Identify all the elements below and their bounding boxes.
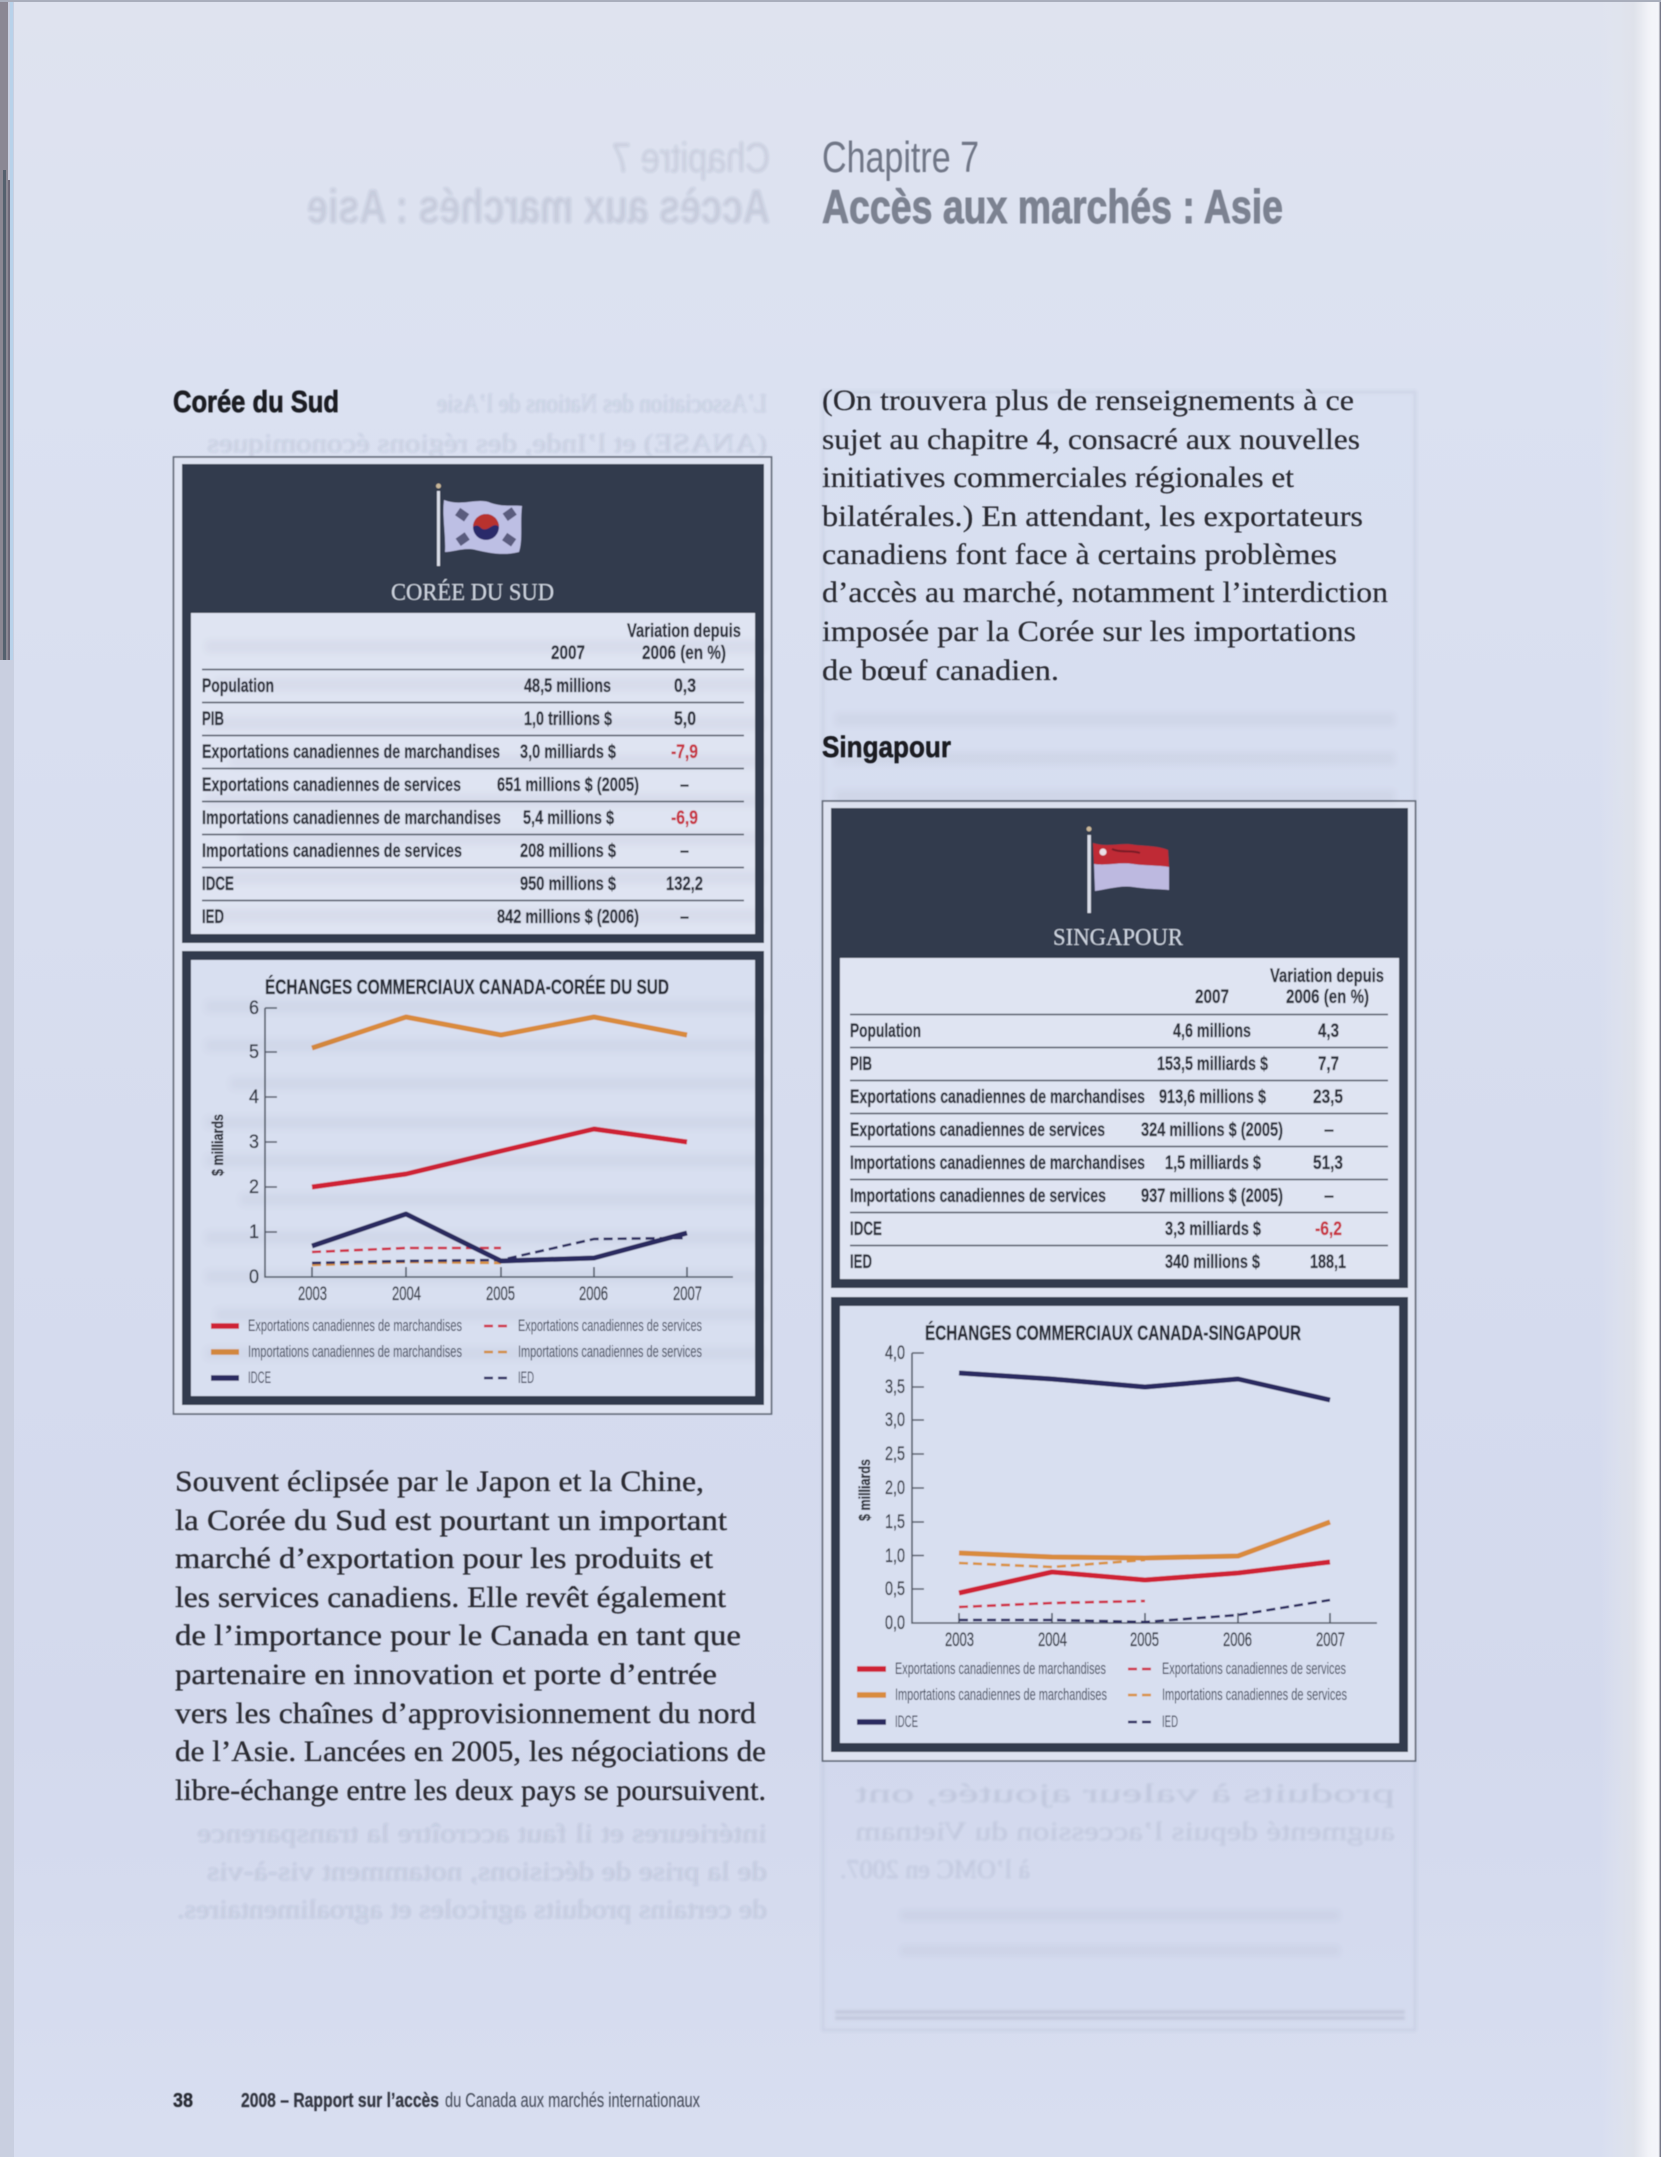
table: Singapour indicators: Variation depuis (1270, 966, 1384, 987)
table: Corée du Sud indicators: Importations canadiennes de services (202, 841, 462, 862)
chart axes: 2007 (1316, 1630, 1345, 1651)
chart axes: 0,5 (885, 1579, 905, 1600)
show-through: reverse page ghost text: produits à valeur ajoutée, ont (854, 1779, 1395, 1808)
table: Corée du Sud indicators: 48,5 millions (524, 676, 611, 697)
table: Corée du Sud indicators: 3,0 milliards $ (520, 742, 616, 763)
table: Corée du Sud indicators: PIB (202, 709, 224, 730)
chart axes: 2 (249, 1177, 259, 1198)
chart axes: 2007 (673, 1284, 702, 1305)
chapter title: Accès aux marchés : Asie (822, 180, 1283, 233)
table: Singapour indicators: 2006 (en %) (1286, 987, 1369, 1008)
chart axes: 1,0 (885, 1546, 905, 1567)
chart lines (312, 1017, 687, 1265)
show-through: reverse page ghost text: intérieures et il faut accroître la transparence (197, 1819, 767, 1848)
table: Singapour indicators: Importations canadiennes de services (850, 1186, 1106, 1207)
table: Singapour indicators: 340 millions $ (1165, 1252, 1260, 1273)
table: Singapour indicators: 153,5 milliards $ (1157, 1054, 1268, 1075)
text block: Corée du Sud paragraph: les services canadiens. Elle revêt également (175, 1581, 727, 1614)
text block: right column paragraph (822, 384, 1388, 687)
chart legend: Importations canadiennes de marchandises (895, 1686, 1107, 1704)
table: Singapour indicators: 324 millions $ (2005) (1141, 1120, 1283, 1141)
table: Corée du Sud indicators: Exportations canadiennes de services (202, 775, 461, 796)
chart legend: Importations canadiennes de services (1162, 1686, 1347, 1704)
chart axes: 3,5 (885, 1377, 905, 1398)
show-through: reverse page ghost text: augmenté depuis l’accession du Vietnam (855, 1817, 1395, 1846)
text block: Corée du Sud paragraph: Souvent éclipsée par le Japon et la Chine, (175, 1465, 704, 1498)
table: Corée du Sud indicators: 208 millions $ (520, 841, 616, 862)
chart axes: $ milliards (210, 1114, 227, 1176)
show-through: reverse page ghost text: à l’OMC en 2007. (840, 1855, 1030, 1884)
show-through: reverse page ghost text: Chapitre 7 (612, 134, 770, 181)
table: Corée du Sud indicators: 0,3 (674, 676, 696, 697)
table: Singapour indicators: 2007 (1195, 987, 1229, 1008)
footer: page number and running title: 38 (173, 2090, 193, 2112)
table: Singapour indicators: – (1324, 1120, 1334, 1141)
text block: Corée du Sud paragraph: la Corée du Sud est pourtant un important (175, 1504, 728, 1537)
table: Singapour indicators (850, 966, 1388, 1273)
table: Singapour indicators: Population (850, 1021, 921, 1042)
text block: Corée du Sud paragraph (175, 1465, 766, 1807)
chart axes: 2,0 (885, 1478, 905, 1499)
chart axes: 2,5 (885, 1444, 905, 1465)
table: Corée du Sud indicators: 2007 (551, 643, 585, 664)
table: Singapour indicators: PIB (850, 1054, 872, 1075)
chart axes: 2006 (1223, 1630, 1252, 1651)
table: Singapour indicators: – (1324, 1186, 1334, 1207)
chart axes: 2003 (945, 1630, 974, 1651)
table: Corée du Sud indicators: -6,9 (671, 808, 698, 829)
chart legend: IDCE (248, 1369, 271, 1387)
table: Singapour indicators: 188,1 (1310, 1252, 1346, 1273)
table: Singapour indicators: IED (850, 1252, 872, 1273)
chart legend: Exportations canadiennes de marchandises (248, 1317, 462, 1335)
chart axes: 2005 (1130, 1630, 1159, 1651)
text block: Corée du Sud paragraph: de l’importance pour le Canada en tant que (175, 1619, 741, 1652)
table: Singapour indicators: Exportations canadiennes de marchandises (850, 1087, 1145, 1108)
table: Singapour indicators: 913,6 millions $ (1159, 1087, 1266, 1108)
text block: right column paragraph: imposée par la Corée sur les importations (822, 615, 1356, 648)
table: Singapour indicators: 23,5 (1313, 1087, 1343, 1108)
show-through: reverse page ghost text: (ANASE) et l’Inde, des régions économiques (207, 429, 767, 458)
table: Singapour indicators: Importations canadiennes de marchandises (850, 1153, 1145, 1174)
country name: SINGAPOUR (1053, 925, 1183, 951)
panel: Singapour (822, 801, 1416, 1761)
table: Corée du Sud indicators: 132,2 (666, 874, 703, 895)
table: Corée du Sud indicators: Variation depuis (627, 621, 741, 642)
Singapour heading: Singapour (822, 731, 951, 764)
chart axes: 4 (249, 1087, 259, 1108)
table: Corée du Sud indicators: Population (202, 676, 274, 697)
chart axes: 0 (249, 1267, 259, 1288)
table: Singapour indicators: Exportations canadiennes de services (850, 1120, 1105, 1141)
text block: right column paragraph: canadiens font face à certains problèmes (822, 538, 1337, 571)
table: Singapour indicators: 4,6 millions (1173, 1021, 1251, 1042)
country name: CORÉE DU SUD (391, 580, 554, 606)
chart axes (210, 998, 733, 1305)
chart axes: 6 (249, 998, 259, 1019)
chart axes: 3 (249, 1132, 259, 1153)
chart: Échanges commerciaux Canada-Corée du Sud (182, 951, 764, 1405)
text block: right column paragraph: sujet au chapitre 4, consacré aux nouvelles (822, 423, 1360, 456)
table: Singapour indicators: 7,7 (1318, 1054, 1339, 1075)
table: Singapour indicators: IDCE (850, 1219, 882, 1240)
table: Corée du Sud indicators: 2006 (en %) (642, 643, 726, 664)
table: Corée du Sud indicators: Exportations canadiennes de marchandises (202, 742, 500, 763)
chart legend: Importations canadiennes de marchandises (248, 1343, 462, 1361)
table: Singapour indicators: 3,3 milliards $ (1165, 1219, 1261, 1240)
table: Singapour indicators: 1,5 milliards $ (1165, 1153, 1261, 1174)
table: Corée du Sud indicators: IED (202, 907, 224, 928)
text block: Corée du Sud paragraph: de l’Asie. Lancées en 2005, les négociations de (175, 1735, 766, 1768)
chart axes: 2005 (486, 1284, 515, 1305)
footer: page number and running title (173, 2090, 700, 2112)
text block: right column paragraph: d’accès au marché, notamment l’interdiction (822, 576, 1388, 609)
table: Corée du Sud indicators: 651 millions $ (2005) (497, 775, 639, 796)
table: Singapour indicators: 51,3 (1313, 1153, 1343, 1174)
text block: Corée du Sud paragraph: vers les chaînes d’approvisionnement du nord (175, 1697, 756, 1730)
chart legend (857, 1660, 1347, 1731)
chart lines (959, 1373, 1330, 1622)
footer: page number and running title: 2008 – Rapport sur l’accès (241, 2090, 439, 2112)
table: Corée du Sud indicators (202, 621, 744, 928)
show-through: reverse page box (823, 392, 1415, 2030)
chart axes: 5 (249, 1042, 259, 1063)
show-through: reverse page ghost text (177, 134, 1395, 1924)
panel: Corée du Sud profile (182, 464, 764, 943)
table: Corée du Sud indicators: -7,9 (671, 742, 698, 763)
chart axes: 2004 (1038, 1630, 1067, 1651)
table: Corée du Sud indicators: 950 millions $ (520, 874, 616, 895)
table: Corée du Sud indicators: 1,0 trillions $ (524, 709, 612, 730)
table: Corée du Sud indicators: – (680, 775, 689, 796)
table: Corée du Sud indicators: – (680, 907, 689, 928)
table: Corée du Sud indicators: 5,0 (674, 709, 696, 730)
table: Singapour indicators: 4,3 (1318, 1021, 1339, 1042)
show-through: reverse page ghost text: de la prise de décisions, notamment vis-à-vis (207, 1857, 767, 1886)
table: Singapour indicators: 937 millions $ (2005) (1141, 1186, 1283, 1207)
chart legend: Exportations canadiennes de marchandises (895, 1660, 1106, 1678)
icon: South Korea flag (436, 484, 522, 566)
table: Corée du Sud indicators: 842 millions $ (2006) (497, 907, 639, 928)
chart legend: IED (518, 1369, 534, 1387)
table: Corée du Sud indicators: IDCE (202, 874, 234, 895)
chart axes: $ milliards (857, 1459, 874, 1521)
text block: Corée du Sud paragraph: marché d’exportation pour les produits et (175, 1542, 714, 1575)
text block: Corée du Sud paragraph: libre-échange entre les deux pays se poursuivent. (175, 1774, 766, 1807)
text block: right column paragraph: (On trouvera plus de renseignements à ce (822, 384, 1354, 417)
text block: right column paragraph: bilatérales.) En attendant, les exportateurs (822, 500, 1363, 533)
chart axes: 1 (249, 1222, 259, 1243)
chart legend: Exportations canadiennes de services (518, 1317, 702, 1335)
table: Corée du Sud indicators: – (680, 841, 689, 862)
chart title: ÉCHANGES COMMERCIAUX CANADA-CORÉE DU SUD (265, 976, 669, 999)
chart legend: IDCE (895, 1713, 918, 1731)
chart axes: 3,0 (885, 1410, 905, 1431)
text block: Corée du Sud paragraph: partenaire en innovation et porte d’entrée (175, 1658, 717, 1691)
chart axes: 2006 (579, 1284, 608, 1305)
chapter title: Chapitre 7 (822, 133, 979, 182)
icon: Singapore flag (1086, 826, 1169, 913)
chart axes: 2004 (392, 1284, 421, 1305)
chart axes: 0,0 (885, 1613, 905, 1634)
table: Corée du Sud indicators: 5,4 millions $ (523, 808, 614, 829)
panel: Corée du Sud (174, 457, 772, 1414)
show-through: reverse page ghost text: Accès aux marchés : Asie (307, 181, 770, 234)
chart: Échanges commerciaux Canada-Singapour (831, 1297, 1408, 1752)
footer: page number and running title: du Canada aux marchés internationaux (445, 2090, 700, 2112)
chart axes: 2003 (298, 1284, 327, 1305)
Corée du Sud heading: Corée du Sud (173, 384, 339, 419)
chart axes: 4,0 (885, 1343, 905, 1364)
chart axes: 1,5 (885, 1512, 905, 1533)
text block: right column paragraph: de bœuf canadien. (822, 654, 1059, 687)
chart title: ÉCHANGES COMMERCIAUX CANADA-SINGAPOUR (925, 1322, 1301, 1345)
chapter title (822, 133, 1283, 233)
panel: Singapour profile (831, 808, 1408, 1288)
chart legend: Importations canadiennes de services (518, 1343, 702, 1361)
chart axes (857, 1343, 1377, 1651)
table: Corée du Sud indicators: Importations canadiennes de marchandises (202, 808, 501, 829)
table: Singapour indicators: -6,2 (1315, 1219, 1342, 1240)
chart legend: Exportations canadiennes de services (1162, 1660, 1346, 1678)
chart legend (211, 1317, 702, 1387)
show-through: reverse page ghost text: L’Association des Nations de l’Asie (437, 389, 767, 418)
show-through: reverse page ghost text: de certains produits agricoles et agroalimentaires. (177, 1895, 767, 1924)
text block: right column paragraph: initiatives commerciales régionales et (822, 461, 1295, 494)
chart legend: IED (1162, 1713, 1178, 1731)
